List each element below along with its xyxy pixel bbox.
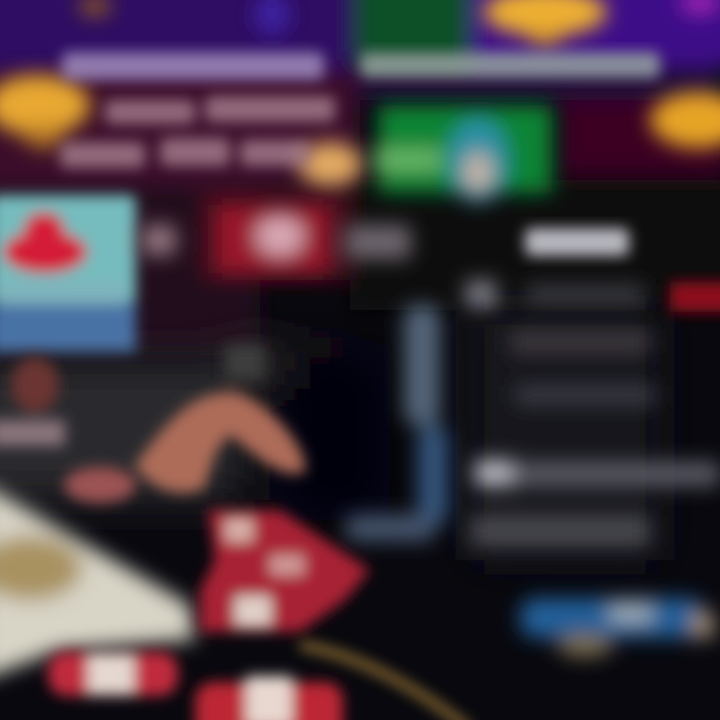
gold table edge [300, 645, 470, 720]
panel: green screen [372, 105, 552, 202]
hand [0, 345, 305, 503]
heading: blurred title left [62, 52, 324, 80]
panel: red banner [142, 205, 411, 273]
poker chips: red stack [200, 510, 370, 632]
heading: white label right [525, 228, 629, 256]
white card on table [0, 482, 195, 680]
red accent [670, 282, 720, 312]
panel: teal card with red heart [0, 195, 136, 352]
person: blue streak [345, 305, 448, 541]
text block: subtitle lines [60, 96, 335, 168]
blue chip stack right [520, 598, 714, 657]
background colour blocks [0, 0, 720, 355]
poker chip: bottom left [48, 652, 178, 696]
poker chip: bottom centre [195, 676, 343, 720]
table and machine shading [0, 310, 660, 560]
machine panel: dark stacked rows [465, 280, 720, 547]
yellow hearts [0, 0, 720, 186]
heading: blurred title right [360, 52, 660, 78]
